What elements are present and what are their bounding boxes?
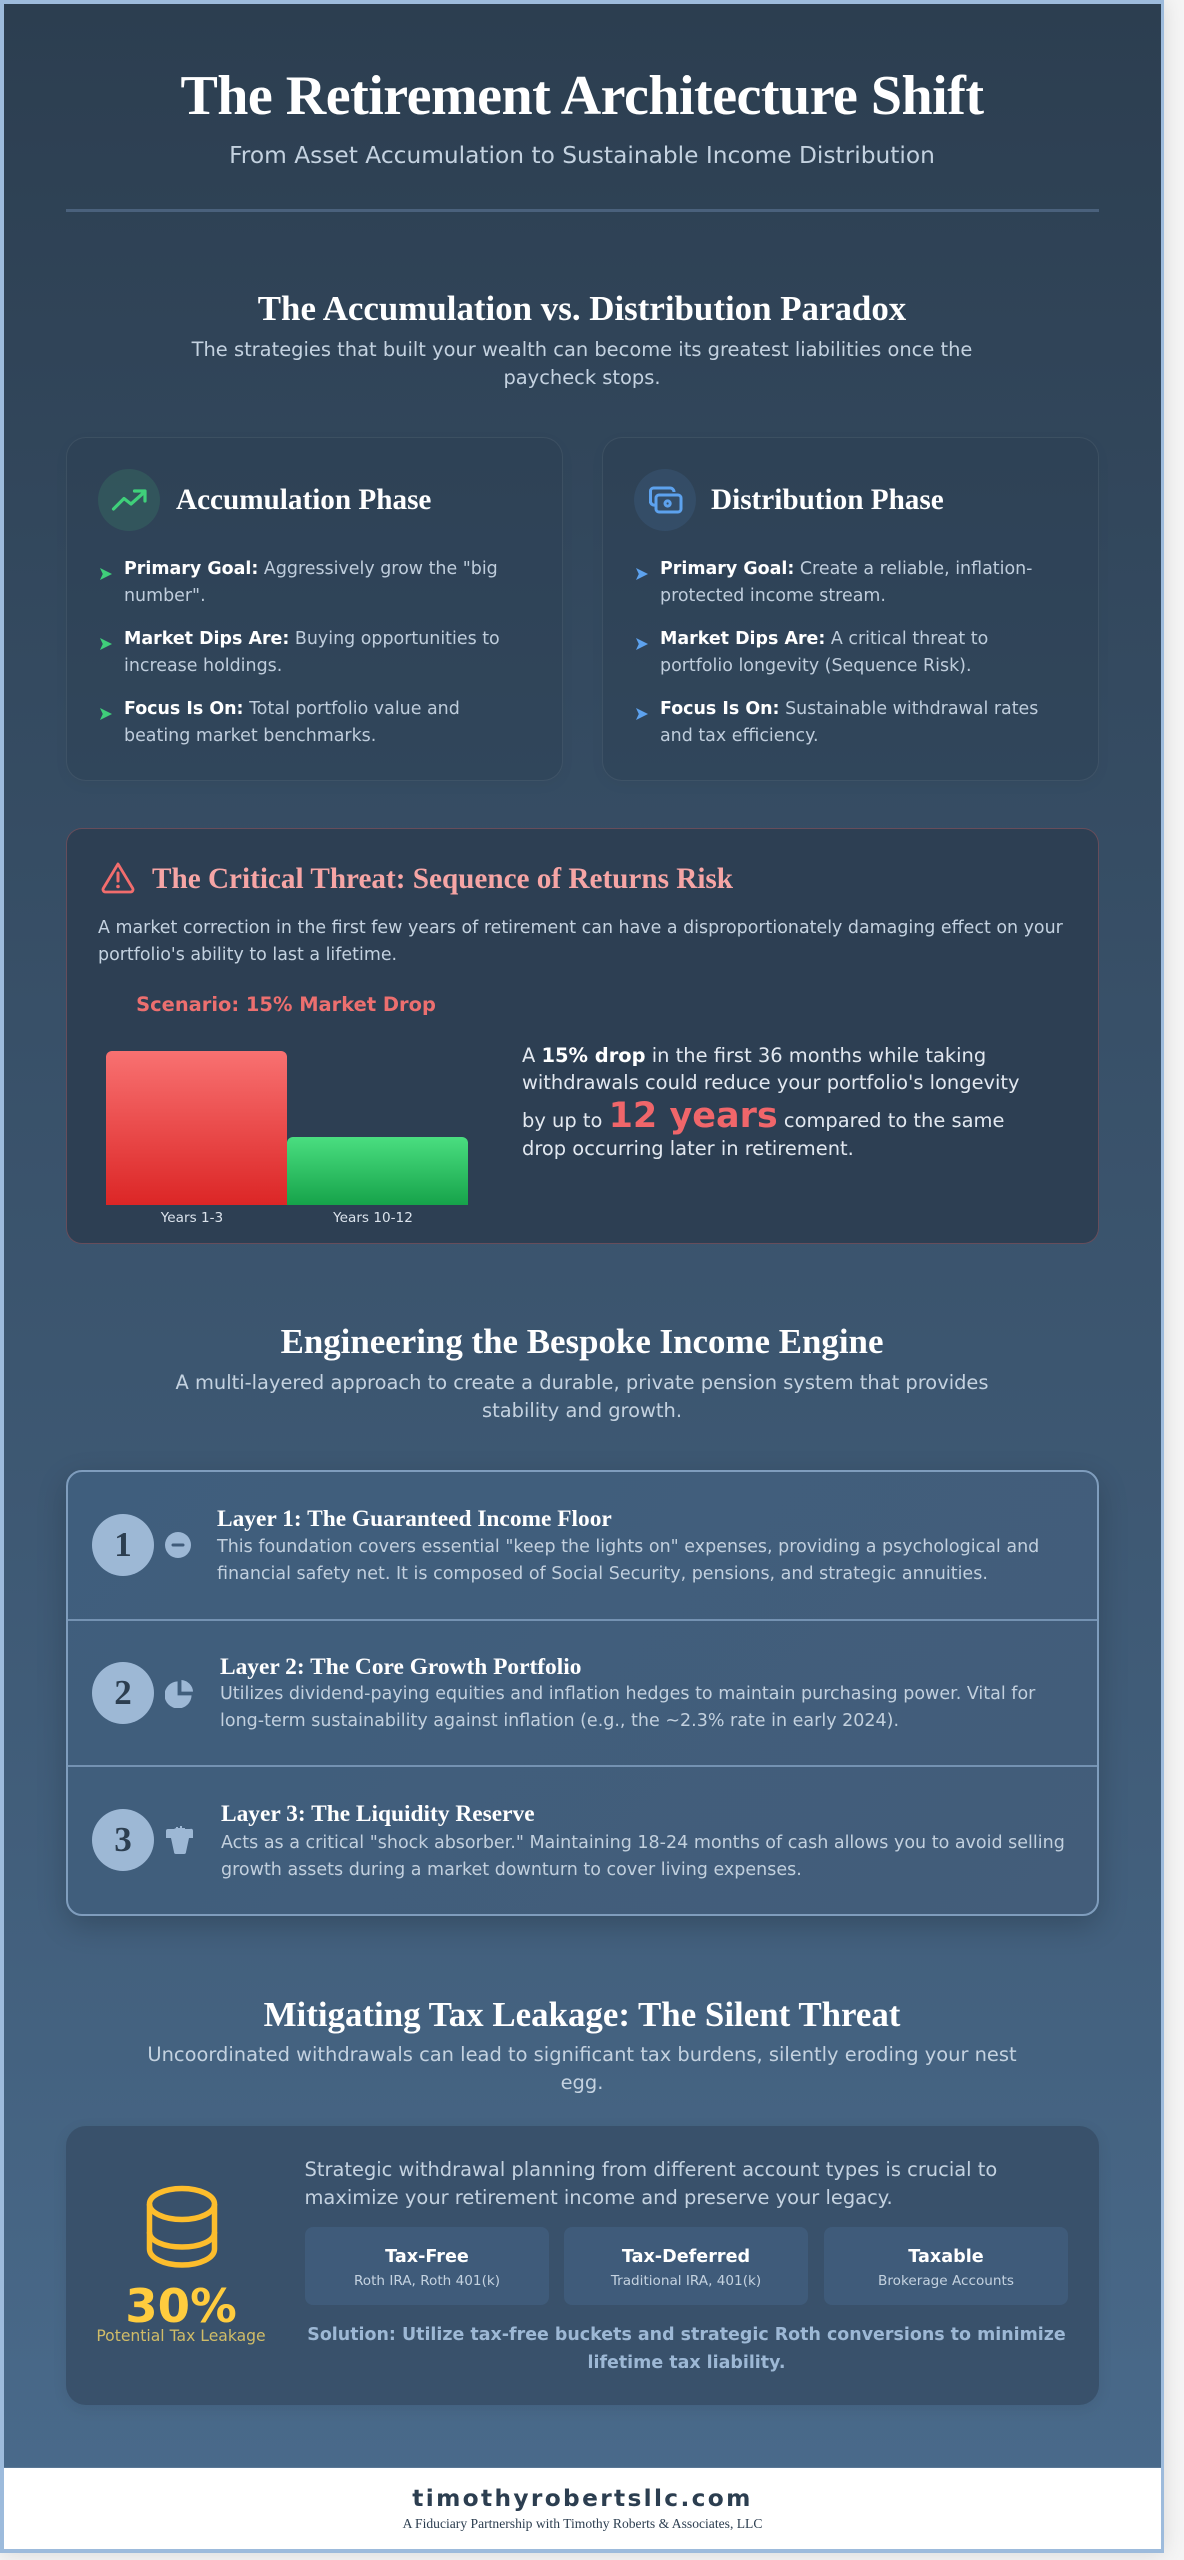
list item: focus: and tax efficiency. xyxy=(660,726,818,746)
label: years 10-12: Years 10-12 xyxy=(333,1210,413,1226)
layer 1 description xyxy=(216,1537,1039,1584)
tax intro text xyxy=(304,2158,997,2208)
panel: income layers xyxy=(66,1470,1099,1916)
layer 2 heading: Layer 2: The Core Growth Portfolio xyxy=(220,1654,581,1680)
callout: 12 years: drop occurring later in retirement. xyxy=(522,1136,854,1160)
label: years 1-3: Years 1-3 xyxy=(161,1210,223,1226)
section intro: income engine: A multi-layered approach to create a durable, private pension system that provides xyxy=(175,1371,989,1394)
threat description: A market correction in the first few years of retirement can have a disproportionately damaging effect on your xyxy=(98,918,1063,938)
bar chart xyxy=(106,1051,468,1226)
number badge 3: 3 xyxy=(114,1820,132,1859)
list item: primary goal xyxy=(636,558,1032,606)
section intro: income engine: stability and growth. xyxy=(482,1399,682,1422)
list item: focus xyxy=(636,698,1038,746)
icon: banknotes xyxy=(634,469,696,531)
bar: years 10-12 xyxy=(287,1137,468,1205)
icon: reserve pot xyxy=(166,1826,193,1854)
bar: years 1-3 xyxy=(106,1051,287,1205)
panel: critical threat xyxy=(66,828,1099,1244)
footer tagline: A Fiduciary Partnership with Timothy Roberts & Associates, LLC xyxy=(403,2516,762,2531)
layer 2 row xyxy=(68,1621,1097,1767)
solution text: Solution: Utilize tax-free buckets and strategic Roth conversions to minimize xyxy=(307,2325,1066,2345)
icon: warning triangle xyxy=(102,862,134,894)
solution text xyxy=(307,2325,1066,2372)
layer 2 description xyxy=(220,1684,1036,1731)
list item: focus: beating market benchmarks. xyxy=(124,726,376,746)
list item: market dips: increase holdings. xyxy=(124,656,282,676)
bucket: tax-deferred xyxy=(564,2227,808,2305)
icon: trending up xyxy=(98,469,160,531)
layer 3 description xyxy=(221,1833,1065,1880)
callout: 12 years: by up to 12 years compared to the same xyxy=(522,1096,1004,1136)
layer 3 row xyxy=(92,1801,1065,1880)
bucket title: Taxable xyxy=(908,2247,984,2267)
list item: focus xyxy=(100,698,460,746)
title: The Retirement Architecture Shift xyxy=(180,65,984,127)
section intro: tax leakage xyxy=(147,2043,1017,2094)
bucket: tax-free xyxy=(305,2227,549,2305)
panel: distribution phase xyxy=(602,437,1099,781)
list item: market dips: Market Dips Are: Buying opportunities to xyxy=(124,628,500,648)
list item: primary goal: protected income stream. xyxy=(660,586,886,606)
panel: accumulation phase xyxy=(66,437,563,781)
stat label: Potential Tax Leakage xyxy=(96,2327,266,2345)
heading: accumulation phase: Accumulation Phase xyxy=(176,484,431,516)
list item: primary goal xyxy=(100,558,498,606)
list item: market dips xyxy=(100,628,500,676)
layer 2 description: Utilizes dividend-paying equities and inflation hedges to maintain purchasing power. Vital for xyxy=(220,1684,1035,1704)
section intro: paradox: paycheck stops. xyxy=(503,366,661,389)
number badge 3 xyxy=(92,1809,154,1871)
layer 1 row xyxy=(68,1472,1097,1621)
bucket detail: Brokerage Accounts xyxy=(878,2273,1014,2289)
heading: critical threat: The Critical Threat: Sequence of Returns Risk xyxy=(152,863,733,895)
section heading: income engine: Engineering the Bespoke Income Engine xyxy=(281,1322,883,1361)
callout: 12 years xyxy=(522,1044,1020,1160)
tax intro text: Strategic withdrawal planning from different account types is crucial to xyxy=(304,2158,997,2181)
layer 3 description: growth assets during a market downturn to cover living expenses. xyxy=(221,1860,802,1880)
solution text: lifetime tax liability. xyxy=(587,2352,786,2372)
list item: focus: Focus Is On: Sustainable withdrawal rates xyxy=(660,698,1038,718)
icon: pie chart xyxy=(165,1680,193,1708)
number badge 2 xyxy=(92,1662,154,1724)
stat: 30 percent: 30% xyxy=(125,2279,237,2333)
layer 3 heading: Layer 3: The Liquidity Reserve xyxy=(221,1801,535,1827)
threat description xyxy=(98,918,1063,965)
subtitle: From Asset Accumulation to Sustainable Income Distribution xyxy=(229,142,935,169)
section heading: tax leakage: Mitigating Tax Leakage: The Silent Threat xyxy=(264,1995,900,2034)
list item: market dips: Market Dips Are: A critical threat to xyxy=(660,628,988,648)
bucket detail: Roth IRA, Roth 401(k) xyxy=(354,2273,500,2289)
chart title: Scenario: 15% Market Drop xyxy=(136,993,436,1016)
bucket detail: Traditional IRA, 401(k) xyxy=(611,2273,761,2289)
heading: distribution phase: Distribution Phase xyxy=(711,484,944,516)
callout: 12 years: withdrawals could reduce your portfolio's longevity xyxy=(522,1071,1020,1094)
layer 1 description: financial safety net. It is composed of Social Security, pensions, and strategic annuities. xyxy=(217,1564,988,1584)
section intro: tax leakage: egg. xyxy=(561,2071,603,2094)
bucket title: Tax-Deferred xyxy=(622,2247,750,2267)
section heading: paradox: The Accumulation vs. Distribution Paradox xyxy=(258,289,906,328)
callout: 12 years: A 15% drop in the first 36 months while taking xyxy=(522,1044,986,1066)
bucket title: Tax-Free xyxy=(385,2247,469,2267)
icon: database coins xyxy=(146,2186,218,2268)
section intro: income engine xyxy=(175,1371,989,1422)
layer 2 description: long-term sustainability against inflation (e.g., the ~2.3% rate in early 2024). xyxy=(220,1711,899,1731)
icon: minus circle xyxy=(165,1532,191,1558)
list item: focus: Focus Is On: Total portfolio value and xyxy=(124,698,460,718)
threat description: portfolio's ability to last a lifetime. xyxy=(98,945,397,965)
layer 1 heading: Layer 1: The Guaranteed Income Floor xyxy=(217,1506,612,1532)
tax intro text: maximize your retirement income and preserve your legacy. xyxy=(304,2186,893,2208)
number badge 1: 1 xyxy=(114,1525,132,1564)
header divider xyxy=(66,209,1099,212)
number badge 1 xyxy=(92,1514,154,1576)
list item: primary goal: number". xyxy=(124,586,206,606)
list item: market dips: portfolio longevity (Sequence Risk). xyxy=(660,656,972,676)
panel: tax leakage xyxy=(66,2126,1099,2405)
section intro: paradox: The strategies that built your wealth can become its greatest liabilities once the xyxy=(192,338,972,361)
list item: primary goal: Primary Goal: Create a reliable, inflation- xyxy=(660,558,1032,578)
footer website: timothyrobertsllc.com xyxy=(412,2485,753,2512)
list item: market dips xyxy=(636,628,988,676)
list item: primary goal: Primary Goal: Aggressively grow the "big xyxy=(124,558,498,578)
footer xyxy=(4,2467,1161,2549)
section intro: paradox xyxy=(192,338,972,389)
layer 1 description: This foundation covers essential "keep the lights on" expenses, providing a psychological and xyxy=(217,1537,1039,1557)
layer 3 description: Acts as a critical "shock absorber." Maintaining 18-24 months of cash allows you to avoid selling xyxy=(221,1833,1065,1853)
bucket: taxable xyxy=(824,2227,1068,2305)
section intro: tax leakage: Uncoordinated withdrawals can lead to significant tax burdens, silently eroding your nest xyxy=(147,2043,1017,2066)
number badge 2: 2 xyxy=(114,1673,132,1712)
